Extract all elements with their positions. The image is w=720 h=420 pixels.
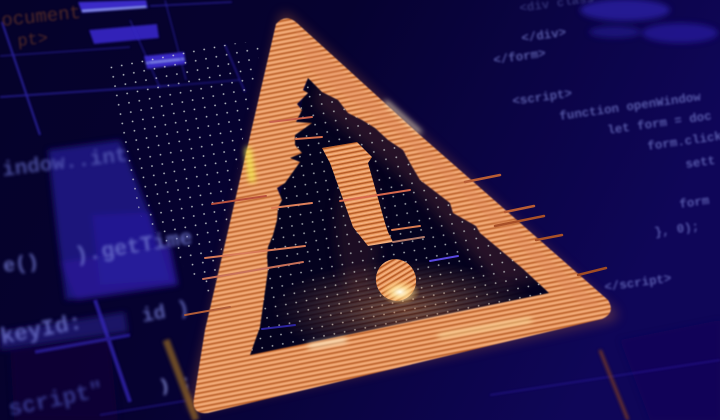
text block: blurred orange code top-left: ocument	[0, 2, 82, 32]
text block: blurred code left side	[0, 145, 194, 420]
text block: blurred code left side: e()	[2, 251, 41, 279]
decorative blurred orange streaks	[166, 340, 628, 420]
text block: blurred code right side: form	[679, 194, 711, 212]
text block: blurred code left side: keyId:	[0, 310, 85, 351]
text block: blurred code right side: </div>	[521, 26, 567, 46]
inner shadow tint	[315, 80, 540, 293]
text block: blurred code right side: <script>	[512, 87, 573, 109]
exclamation bar	[322, 142, 393, 246]
text block: blurred orange code top-left	[0, 2, 82, 52]
highlights on triangle	[248, 102, 530, 346]
panel: bright blue glitch bars	[78, 0, 186, 69]
text block: blurred code right side: let form = doc	[607, 109, 713, 138]
text block: blurred code left side: indow..int	[1, 145, 129, 183]
triangle frame	[194, 18, 611, 413]
inner warm striped glow	[280, 264, 523, 340]
text block: blurred code right side: </script>	[604, 272, 672, 295]
text block: blurred code left side: ).getTime	[73, 226, 194, 269]
inner dots	[240, 60, 560, 365]
text block: blurred orange code top-left: pt>	[17, 30, 49, 52]
inner dark area	[240, 60, 560, 365]
soft salmon overlay on right edge	[295, 28, 600, 308]
text block: blurred code right side: }, 0);	[654, 220, 700, 240]
glitch streaks left and inside	[185, 117, 606, 329]
glow around triangle	[195, 18, 612, 405]
dotted grid behind triangle	[105, 40, 262, 300]
icon: warning triangle	[185, 18, 611, 413]
text block: blurred code right side: </form>	[493, 47, 547, 68]
text block: blurred code left side: ) ;	[158, 373, 193, 398]
text block: blurred code left side: id )	[140, 297, 191, 329]
text block: blurred code right side: function openWindow	[559, 90, 702, 124]
text block: blurred code right side: sett	[685, 154, 716, 172]
exclamation dot	[370, 253, 422, 307]
text block: blurred code right side	[493, 0, 720, 295]
